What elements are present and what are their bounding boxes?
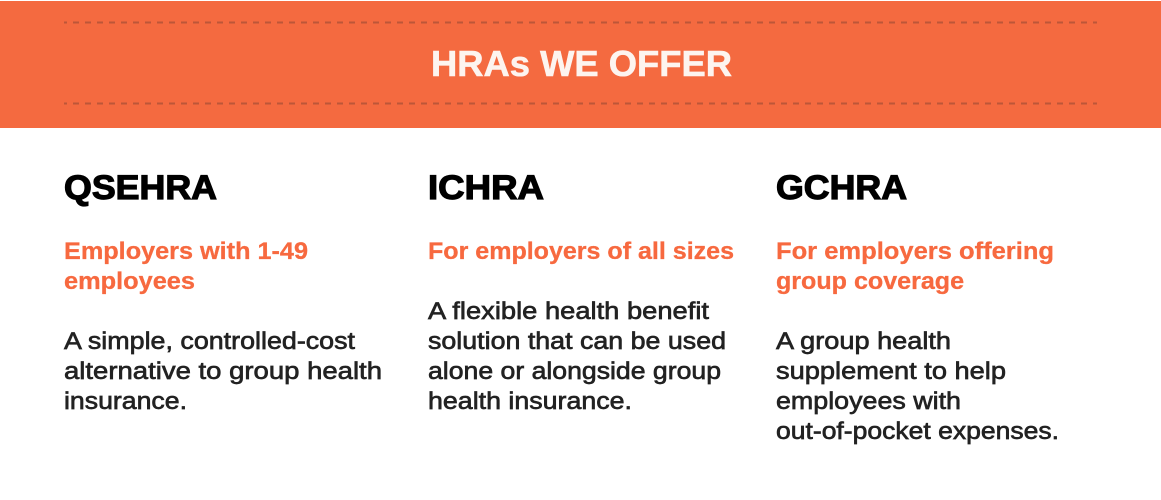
subheading: GCHRA audience bbox=[776, 238, 1054, 295]
text block: GCHRA description: employees with bbox=[776, 388, 961, 415]
panel: QSEHRA bbox=[64, 169, 382, 415]
subheading: GCHRA audience: group coverage bbox=[776, 268, 964, 295]
subheading: QSEHRA audience: employees bbox=[64, 268, 195, 295]
text block: QSEHRA description bbox=[64, 328, 382, 415]
subheading: QSEHRA audience bbox=[64, 238, 308, 295]
text block: ICHRA description: alone or alongside group bbox=[428, 358, 721, 385]
subheading: GCHRA audience: For employers offering bbox=[776, 238, 1054, 265]
text block: QSEHRA description: A simple, controlled-cost bbox=[64, 328, 355, 355]
text block: GCHRA description: A group health bbox=[776, 328, 951, 355]
subheading: ICHRA audience: For employers of all sizes bbox=[428, 238, 734, 265]
text block: ICHRA description: A flexible health benefit bbox=[428, 298, 709, 325]
text block: ICHRA description bbox=[428, 298, 726, 415]
title: HRAs WE OFFER bbox=[431, 43, 732, 84]
heading: ICHRA: ICHRA bbox=[428, 169, 544, 207]
text block: ICHRA description: health insurance. bbox=[428, 388, 632, 415]
subheading: QSEHRA audience: Employers with 1-49 bbox=[64, 238, 308, 265]
text block: GCHRA description: supplement to help bbox=[776, 358, 1006, 385]
panel: GCHRA bbox=[776, 169, 1059, 445]
text block: ICHRA description: solution that can be used bbox=[428, 328, 726, 355]
text block: QSEHRA description: insurance. bbox=[64, 388, 187, 415]
header banner bbox=[0, 1, 1161, 128]
heading: GCHRA: GCHRA bbox=[776, 169, 907, 207]
panel: ICHRA bbox=[428, 169, 734, 415]
text block: GCHRA description: out-of-pocket expenses. bbox=[776, 418, 1059, 445]
text block: QSEHRA description: alternative to group health bbox=[64, 358, 382, 385]
heading: QSEHRA: QSEHRA bbox=[64, 169, 217, 207]
text block: GCHRA description bbox=[776, 328, 1059, 445]
